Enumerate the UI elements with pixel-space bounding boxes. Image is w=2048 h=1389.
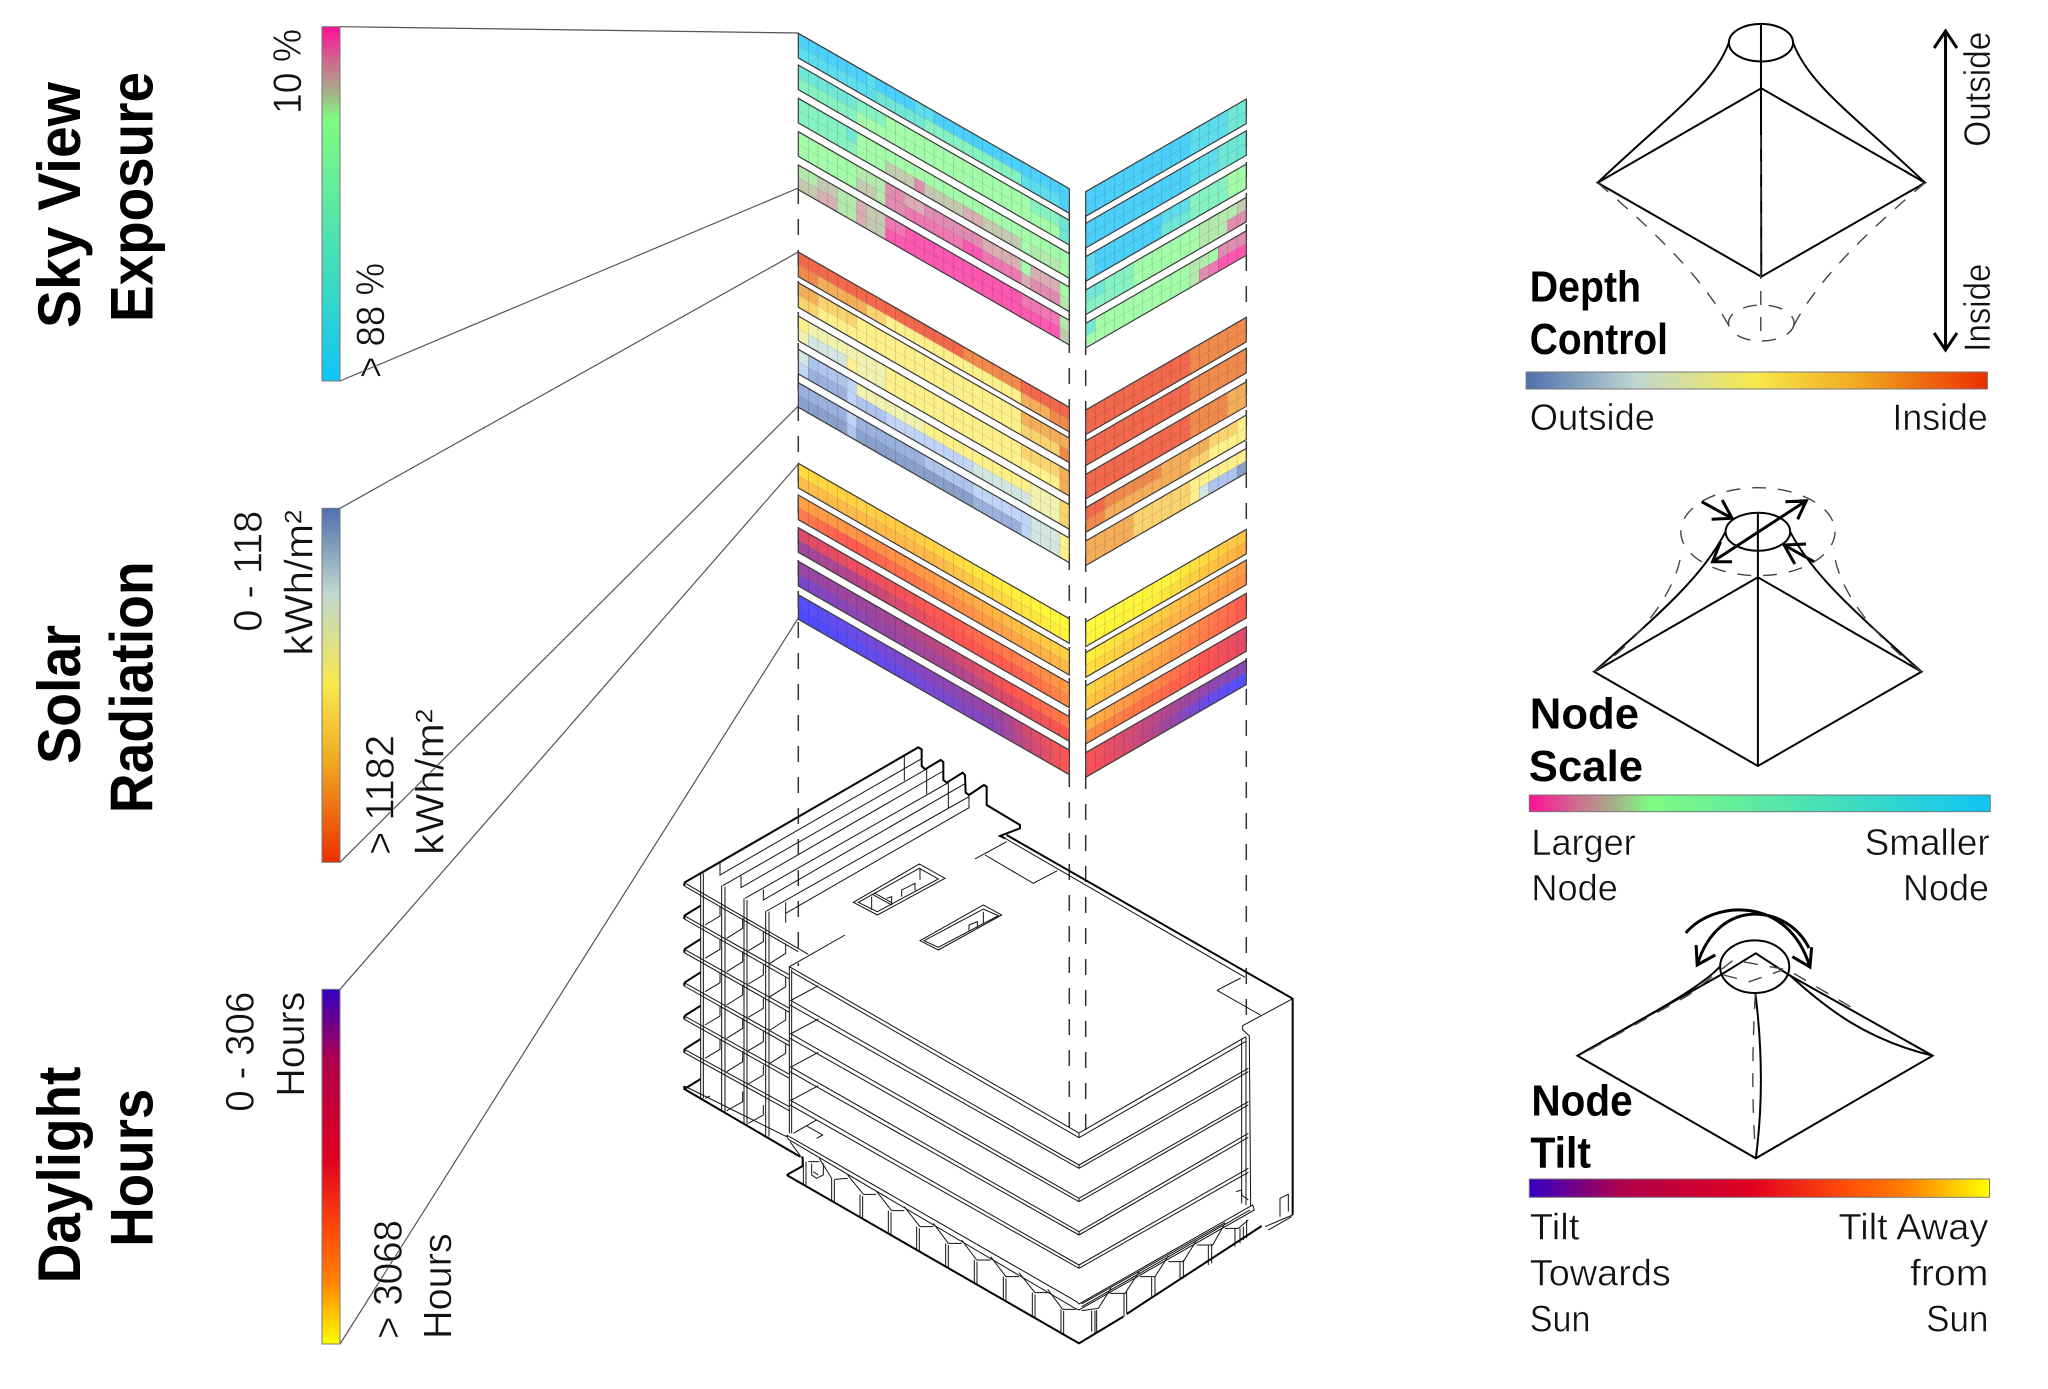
colour scale: solar radiation [227, 508, 452, 862]
heading: node scale: Scale [1529, 742, 1643, 791]
bar labels: larger node and smaller node: Smaller [1865, 822, 1990, 863]
bar labels: tilt towards sun and tilt away from sun [1530, 1206, 1989, 1340]
panel: node scale [1529, 488, 1990, 909]
arrows: node scaling [1702, 500, 1814, 564]
right side wall [1242, 999, 1293, 1230]
bar labels: tilt towards sun and tilt away from sun: Sun [1926, 1299, 1988, 1340]
connector lines from scales to facade strips [340, 27, 798, 1344]
building outer silhouette [684, 747, 1293, 1215]
colour scale: solar radiation: kWh/m² [408, 709, 452, 855]
base columns and brackets, left side [803, 1158, 1076, 1336]
heading: depth control [1530, 263, 1668, 364]
vertical dashed projection lines [798, 100, 1246, 1130]
colour scale: solar radiation: > 1182 [358, 735, 402, 855]
colour scale: solar radiation: 0 - 118 [227, 511, 271, 632]
heading: Solar Radiation: Radiation [99, 561, 166, 813]
base columns and brackets, right side [1082, 1220, 1248, 1333]
label: outside (vertical): Outside [1957, 32, 1998, 147]
facade strips: solar radiation, left wing [798, 252, 1069, 563]
bar labels: outside and inside [1530, 397, 1988, 438]
colour scale: daylight hours: 0 - 306 [218, 992, 262, 1112]
colour bar: node tilt [1529, 1179, 1990, 1197]
heading: Solar Radiation: Solar [26, 625, 93, 764]
heading: Daylight Hours [26, 1067, 166, 1283]
heading: node scale [1529, 689, 1643, 791]
arrows: tilt rotation [1686, 910, 1812, 967]
heading: Daylight Hours: Daylight [26, 1067, 93, 1283]
roof hatch marks [807, 842, 1260, 1138]
colour scale: sky view exposure [266, 27, 393, 381]
heading: node tilt [1530, 1077, 1633, 1178]
left wing floor ledges [684, 883, 808, 1137]
pyramid diagram: node scale [1594, 488, 1921, 766]
colour scale: daylight hours: Hours [269, 992, 313, 1097]
bar labels: tilt towards sun and tilt away from sun: Sun [1530, 1299, 1590, 1340]
left wing columns [701, 873, 769, 1137]
colour bar: depth [1526, 372, 1987, 389]
colour scale: sky view exposure: > 88 % [349, 263, 393, 378]
panel: node tilt [1529, 910, 1990, 1340]
heading: node tilt: Node [1531, 1077, 1633, 1126]
building base [787, 1135, 1262, 1343]
colour scale: sky view exposure: 10 % [266, 29, 310, 114]
heading: Sky View Exposure [26, 72, 166, 328]
heading: depth control: Control [1530, 315, 1668, 364]
rear rib walls [702, 756, 1245, 977]
colour scale: daylight hours: > 3068 [367, 1220, 411, 1339]
base plate [787, 1135, 1254, 1310]
panel: depth control [1526, 24, 1998, 438]
heading: Solar Radiation [26, 561, 166, 813]
stacked floor plates [789, 935, 1248, 1268]
label: inside (vertical): Inside [1957, 264, 1998, 352]
bar labels: tilt towards sun and tilt away from sun: Towards [1530, 1253, 1671, 1294]
axonometric building line drawing [684, 747, 1293, 1343]
facade strips: sky view exposure, right wing [1086, 99, 1246, 348]
colour scale: daylight hours [218, 989, 460, 1344]
bar labels: larger node and smaller node: Node [1531, 868, 1618, 909]
pyramid diagram: depth control [1598, 24, 1925, 341]
bar labels: tilt towards sun and tilt away from sun: from [1910, 1253, 1988, 1294]
heading: Daylight Hours: Hours [99, 1089, 166, 1247]
pyramid diagram: node tilt [1577, 940, 1933, 1158]
facade strips: sky view exposure, left wing [798, 33, 1069, 345]
left wing bay back lines [705, 906, 786, 1123]
heading: node tilt: Tilt [1530, 1129, 1591, 1178]
heading: Sky View Exposure: Sky View [26, 82, 93, 328]
roof openings [853, 864, 1002, 950]
colour bar: node scale [1529, 795, 1990, 812]
bar labels: larger node and smaller node [1531, 822, 1990, 909]
heading: node scale: Node [1530, 689, 1639, 738]
bar labels: tilt towards sun and tilt away from sun: Tilt Away [1838, 1206, 1989, 1247]
arrow: outside to inside [1934, 31, 1957, 350]
facade strips: daylight hours, left wing [798, 463, 1069, 775]
heading: depth control: Depth [1530, 263, 1641, 312]
bar labels: outside and inside: Inside [1892, 397, 1988, 438]
base ground line [787, 1157, 1262, 1343]
colour scale: daylight hours: Hours [416, 1233, 460, 1339]
colour scale: solar radiation: kWh/m² [278, 510, 322, 656]
bar labels: larger node and smaller node: Larger [1531, 822, 1636, 863]
bar labels: larger node and smaller node: Node [1903, 868, 1989, 909]
bar labels: outside and inside: Outside [1530, 397, 1655, 438]
bar labels: tilt towards sun and tilt away from sun: Tilt [1530, 1206, 1579, 1247]
heading: Sky View Exposure: Exposure [99, 72, 166, 322]
facade strips: solar radiation, right wing [1086, 317, 1246, 566]
facade strips: daylight hours, right wing [1086, 529, 1246, 777]
